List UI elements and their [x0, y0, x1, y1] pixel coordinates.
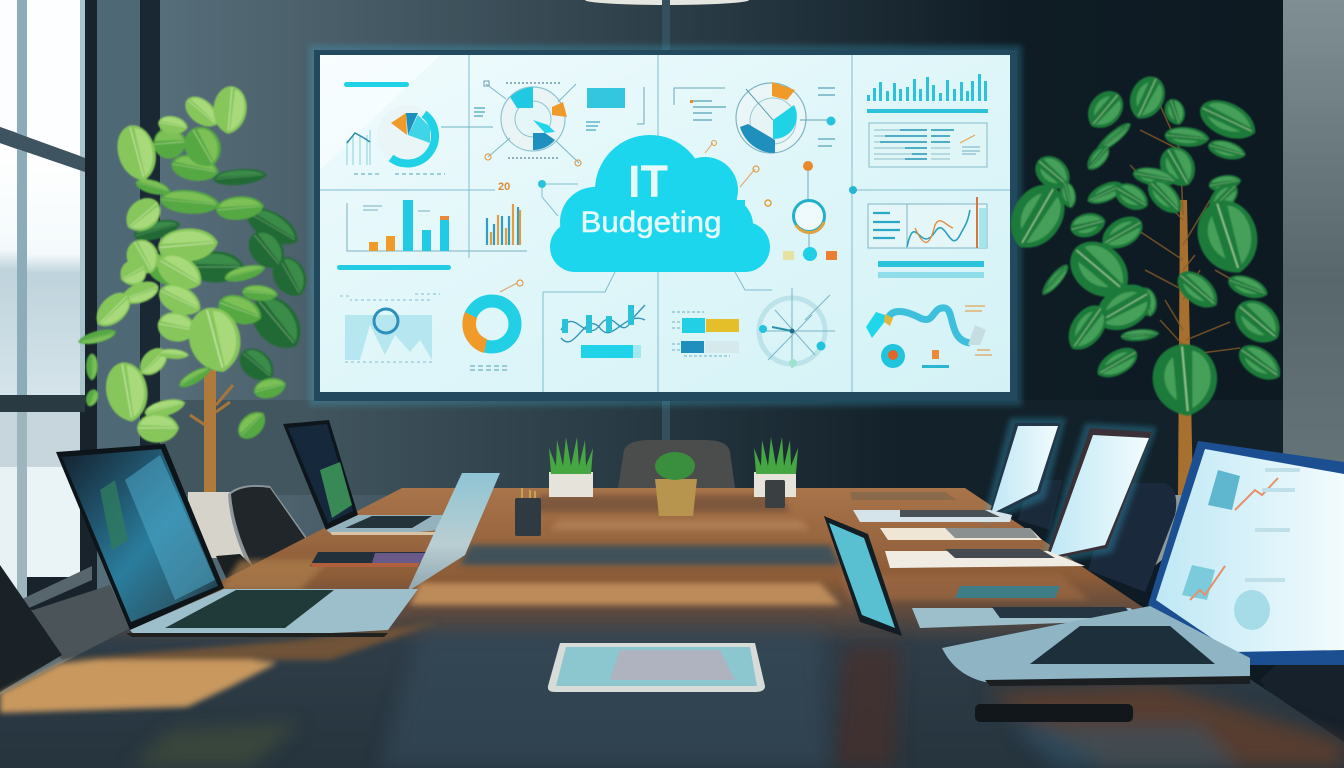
pencil cup right — [765, 480, 785, 508]
chart: line chart panel — [868, 197, 987, 248]
pot: left planter — [188, 492, 248, 558]
chart: top-right histogram — [867, 74, 988, 113]
chair: left — [228, 485, 312, 570]
branches — [1130, 105, 1250, 355]
chart: top radial — [474, 81, 644, 166]
chair: front right — [1260, 600, 1344, 768]
chart: area with ring — [340, 294, 440, 362]
chart: small ring with nodes — [705, 140, 837, 261]
trunk: left — [204, 370, 216, 492]
subtitle text: Budgeting — [580, 206, 722, 239]
chart: candle line — [561, 305, 645, 358]
screen mount pole — [662, 0, 670, 50]
laptop: large left — [56, 444, 418, 637]
trunk: right — [1178, 200, 1193, 495]
laptop: large right — [912, 441, 1344, 686]
plant pot: yellow center — [655, 452, 697, 516]
closed laptop far right — [850, 492, 957, 500]
chair: right — [1088, 483, 1176, 592]
light patches on table — [0, 495, 1090, 713]
text: twenty label: 20 — [498, 181, 510, 193]
chair: head of table — [618, 440, 735, 488]
conference table — [0, 488, 1344, 768]
soft reflections on table — [130, 630, 1344, 768]
title text: IT — [628, 156, 668, 207]
node: divider dot — [849, 186, 857, 194]
chair: right second — [1018, 480, 1062, 530]
chart: wavy ribbon — [866, 306, 992, 368]
chair: left second — [216, 554, 256, 582]
pencil cup left — [515, 488, 541, 536]
window — [0, 0, 97, 612]
chart: small stacked lines — [487, 204, 520, 245]
plant pot: white right — [754, 437, 798, 497]
chart: donut — [462, 280, 523, 370]
laptop: far left back — [283, 420, 448, 535]
laptop: far right — [853, 418, 1066, 524]
plant: right — [999, 71, 1289, 578]
phone: foreground — [975, 704, 1133, 722]
chart: lower bars — [672, 312, 739, 356]
chair: front left — [0, 565, 62, 692]
plant: left — [77, 85, 314, 558]
chart: bar chart — [347, 200, 527, 251]
tablet: standing — [824, 516, 902, 636]
tablet: flat foreground — [548, 643, 765, 692]
plant pot: white left — [549, 437, 593, 497]
laptop: glass center left — [407, 473, 500, 592]
bars: horizontal pair — [878, 261, 984, 278]
pendant lamp — [585, 0, 749, 5]
bar: wide cyan rule — [337, 265, 451, 270]
laptop: mid right — [880, 423, 1157, 568]
chart: upper-right radial — [674, 82, 836, 153]
connector: left of cloud — [538, 180, 578, 216]
pot: right planter — [1140, 495, 1198, 578]
chart: compass dial — [759, 288, 835, 368]
screen mount pole lower — [662, 400, 670, 442]
display grid lines — [320, 55, 1010, 392]
floor — [27, 585, 135, 660]
cloud with title — [550, 135, 770, 272]
chart: top-left pie — [344, 82, 493, 174]
table panel: top right — [869, 123, 987, 167]
small tablet left — [310, 552, 427, 567]
wall display — [309, 45, 1022, 406]
